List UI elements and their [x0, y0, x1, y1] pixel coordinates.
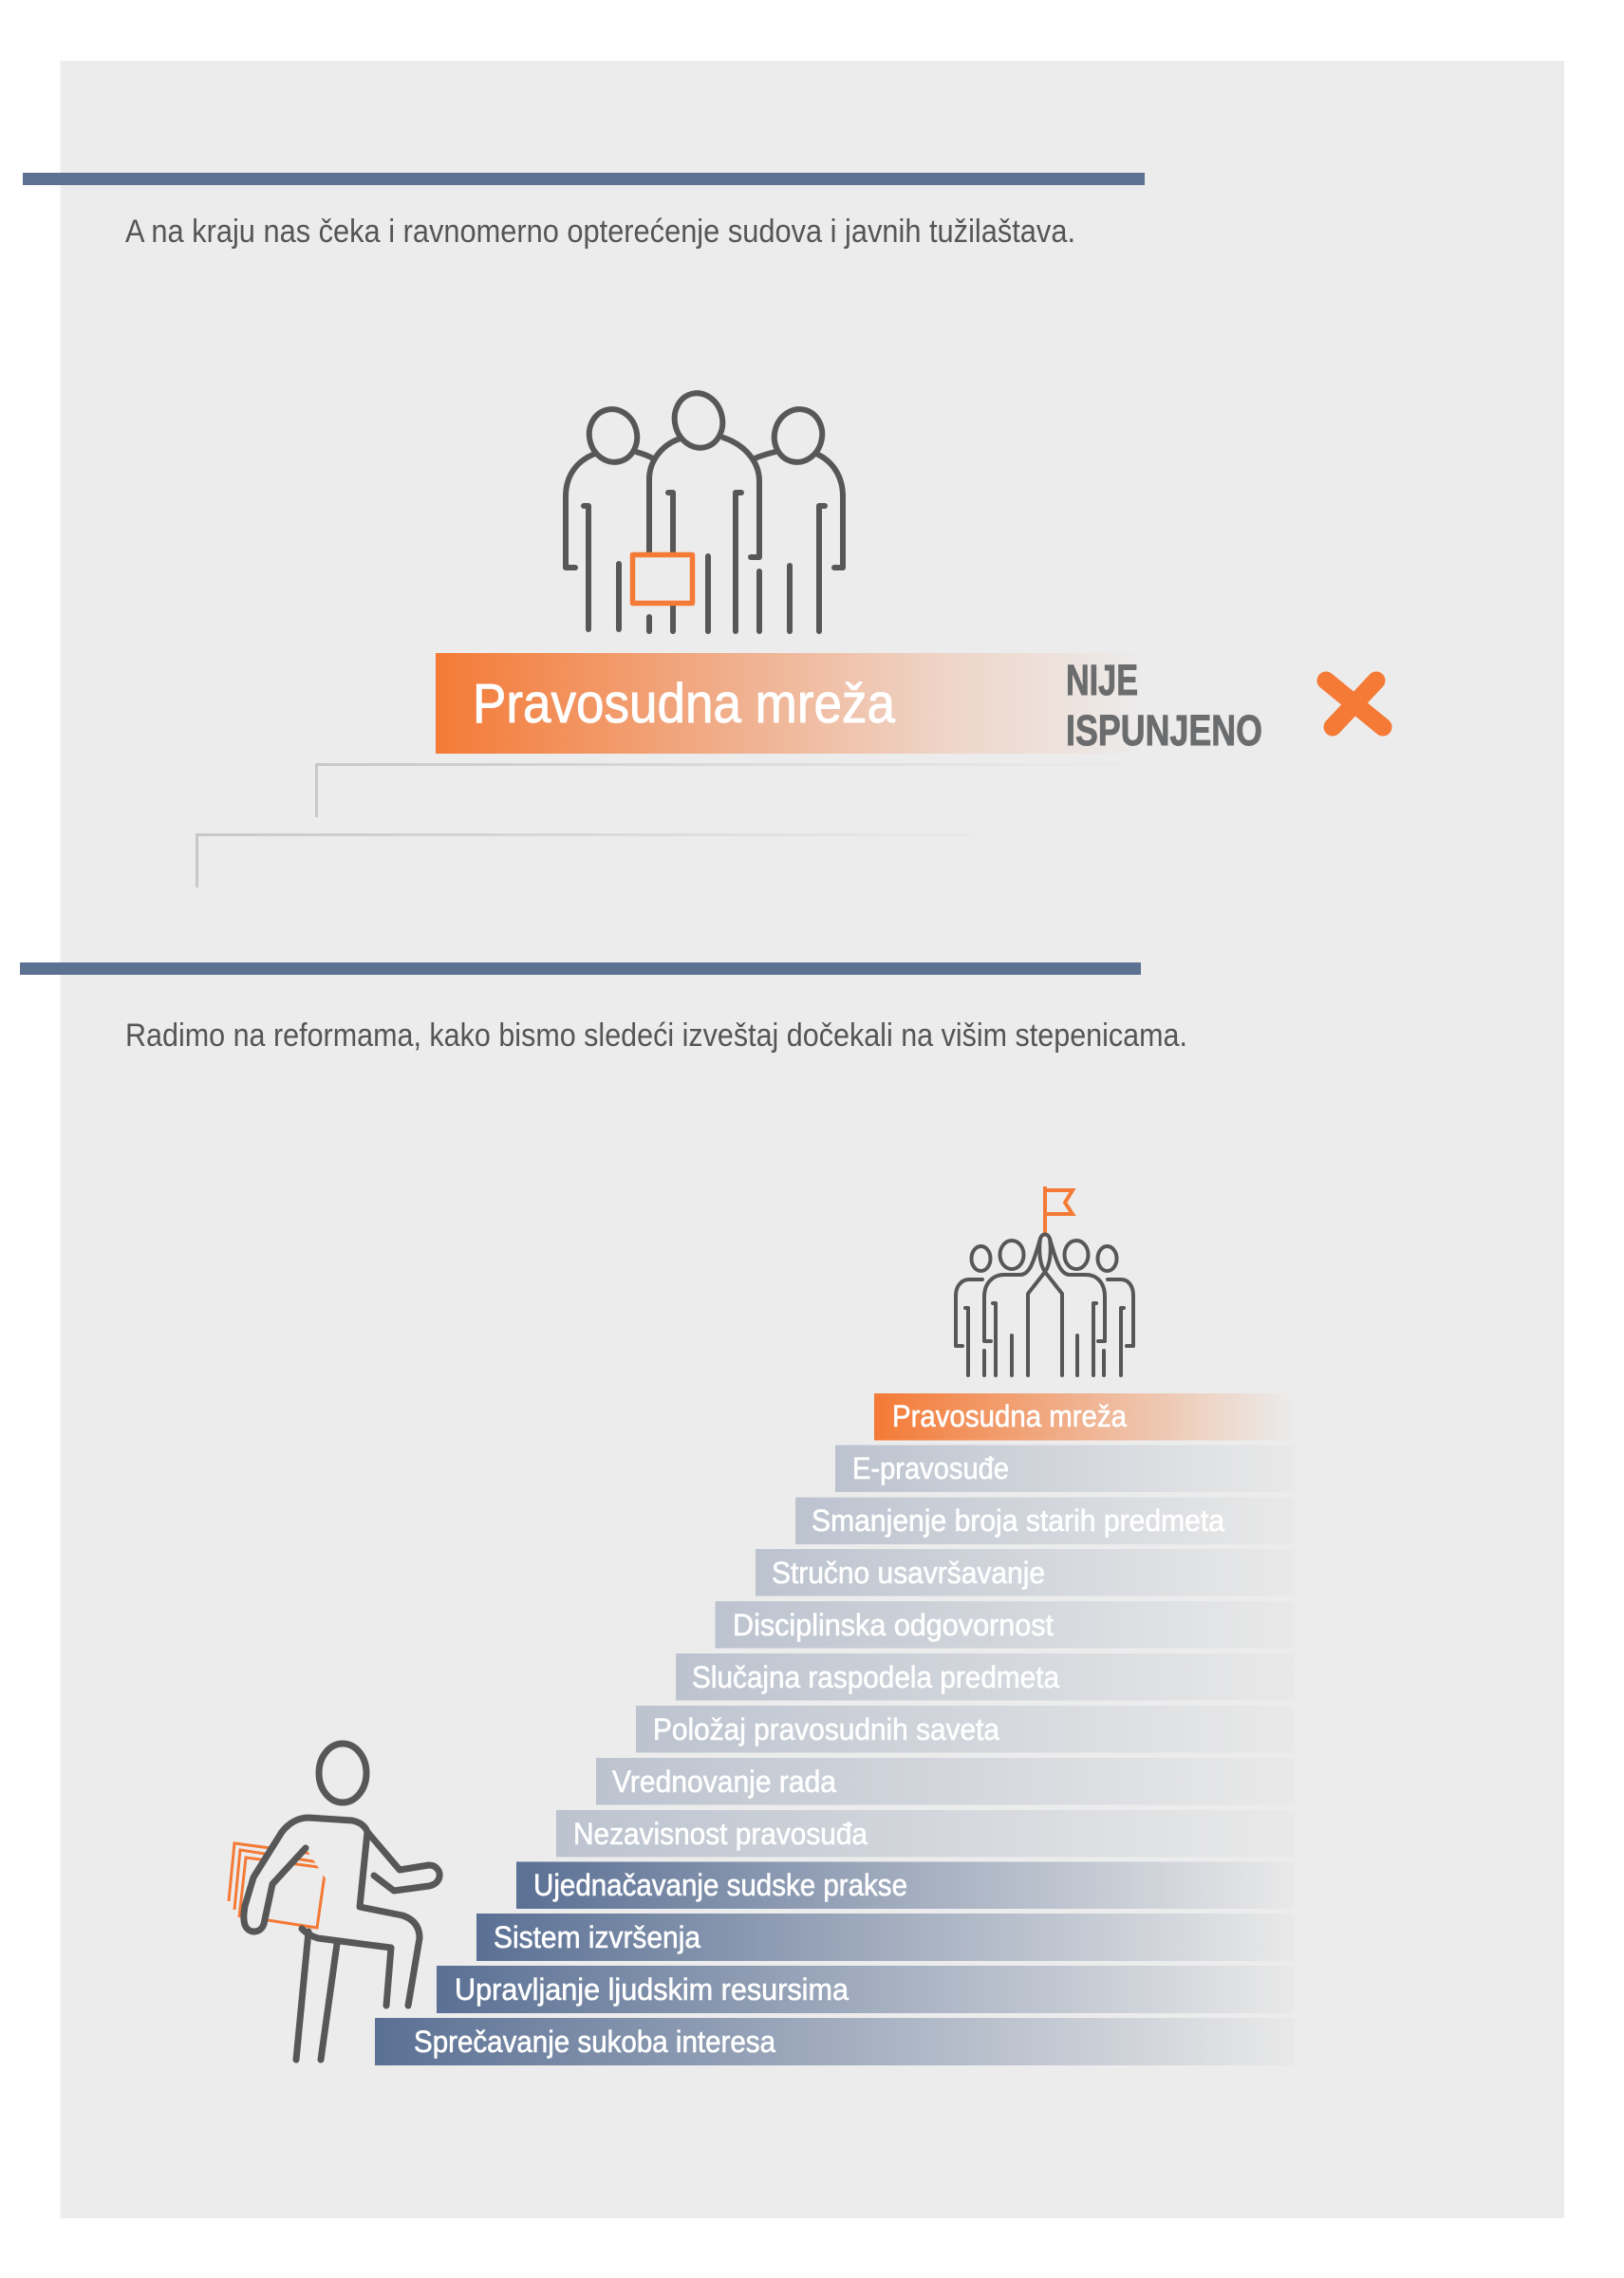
- step: Sprečavanje sukoba interesa: [375, 2018, 1295, 2065]
- status label: not fulfilled: ISPUNJENO: [1066, 706, 1262, 755]
- bar: Pravosudna mreža highlighted: Pravosudna mreža: [473, 673, 896, 735]
- step: Upravljanje ljudskim resursima: [437, 1966, 1295, 2013]
- section bar: second: [20, 962, 1141, 975]
- step: Slučajna raspodela predmeta: Slučajna raspodela predmeta: [692, 1660, 1059, 1694]
- status label: not fulfilled: NIJE: [1066, 656, 1138, 704]
- step: Ujednačavanje sudske prakse: [516, 1862, 1295, 1909]
- icon: orange cross: [1326, 681, 1383, 727]
- step: Smanjenje broja starih predmeta: [795, 1498, 1295, 1544]
- step: Smanjenje broja starih predmeta: Smanjenje broja starih predmeta: [812, 1503, 1224, 1538]
- step: Položaj pravosudnih saveta: [636, 1706, 1295, 1752]
- step: Položaj pravosudnih saveta: Položaj pravosudnih saveta: [653, 1712, 999, 1746]
- step: Vrednovanje rada: [596, 1758, 1295, 1805]
- step: Pravosudna mreža: Pravosudna mreža: [892, 1399, 1127, 1433]
- icon: group of three people with folder: [566, 388, 843, 631]
- step: Disciplinska odgovornost: [716, 1601, 1295, 1648]
- section bar: top: [23, 173, 1145, 185]
- step: Nezavisnost pravosuđa: Nezavisnost pravosuđa: [573, 1817, 868, 1851]
- step: Disciplinska odgovornost: Disciplinska odgovornost: [733, 1608, 1054, 1642]
- step: Vrednovanje rada: Vrednovanje rada: [612, 1765, 836, 1799]
- text: intro second section: Radimo na reformama, kako bismo sledeći izveštaj dočekali na višim stepenicama.: [125, 1018, 1187, 1054]
- icon: orange stacked documents: [229, 1843, 326, 1928]
- icon: team with raised hands and flag: [956, 1186, 1133, 1375]
- text: intro first section: A na kraju nas čeka i ravnomerno opterećenje sudova i javnih tužilaštava.: [125, 214, 1075, 250]
- step: Sistem izvršenja: [476, 1914, 1295, 1961]
- step: Pravosudna mreža: [874, 1393, 1295, 1441]
- step: Sistem izvršenja: Sistem izvršenja: [494, 1920, 700, 1954]
- step: E-pravosuđe: E-pravosuđe: [852, 1451, 1009, 1485]
- status label: not fulfilled: [1066, 656, 1262, 755]
- figure: climbing person: [244, 1744, 439, 2060]
- icon: orange flag: [1045, 1186, 1073, 1234]
- step: Ujednačavanje sudske prakse: Ujednačavanje sudske prakse: [533, 1868, 907, 1902]
- bar: Pravosudna mreža highlighted: [436, 653, 1146, 754]
- icon: person climbing with folders: [229, 1744, 439, 2060]
- step: Upravljanje ljudskim resursima: Upravljanje ljudskim resursima: [455, 1972, 849, 2007]
- step: Stručno usavršavanje: [756, 1549, 1295, 1596]
- lower empty steps outlines: [196, 763, 1150, 887]
- step: Stručno usavršavanje: Stručno usavršavanje: [772, 1556, 1045, 1590]
- step: Sprečavanje sukoba interesa: Sprečavanje sukoba interesa: [414, 2025, 775, 2059]
- step: Slučajna raspodela predmeta: [676, 1653, 1295, 1701]
- step: E-pravosuđe: [835, 1445, 1295, 1492]
- icon: orange folder: [632, 554, 693, 604]
- step: Nezavisnost pravosuđa: [556, 1810, 1295, 1857]
- staircase of reforms: [375, 1393, 1295, 2065]
